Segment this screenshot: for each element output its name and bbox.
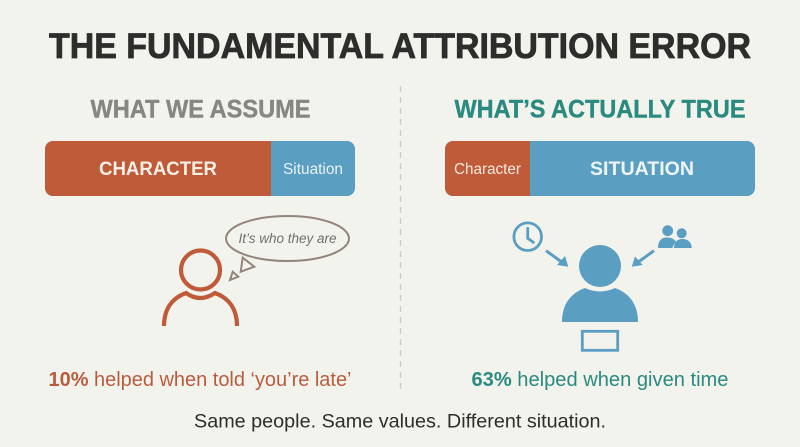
stacked bar: assumed: Situation: [283, 161, 343, 178]
stacked bar: actual: SITUATION: [590, 158, 694, 180]
arrow: clock to person: [546, 251, 568, 267]
panel: what we assume: [45, 96, 355, 391]
panel: what's actually true: [445, 96, 755, 391]
title: THE FUNDAMENTAL ATTRIBUTION ERROR: [49, 27, 751, 66]
icon: people: [658, 225, 692, 248]
icon: solid person: [562, 245, 638, 322]
footer tagline: Same people. Same values. Different situation.: [194, 410, 606, 432]
arrow: people to person: [632, 251, 654, 267]
icon: person outline: [164, 250, 237, 326]
stacked bar: actual: [445, 141, 755, 196]
heading: what's actually true: WHAT’S ACTUALLY TRUE: [454, 96, 746, 124]
stacked bar: assumed: CHARACTER: [99, 158, 217, 180]
stacked bar: assumed: [45, 141, 355, 196]
stat: 63%: 63% helped when given time: [472, 369, 728, 391]
icon: laptop rectangle: [582, 331, 618, 350]
heading: what we assume: WHAT WE ASSUME: [90, 96, 310, 124]
speech bubble: It’s who they are: [238, 231, 336, 246]
speech bubble: [226, 216, 349, 280]
stacked bar: actual: Character: [454, 161, 521, 178]
icon: clock: [514, 223, 542, 250]
stat: 10%: 10% helped when told ‘you’re late’: [48, 369, 352, 391]
